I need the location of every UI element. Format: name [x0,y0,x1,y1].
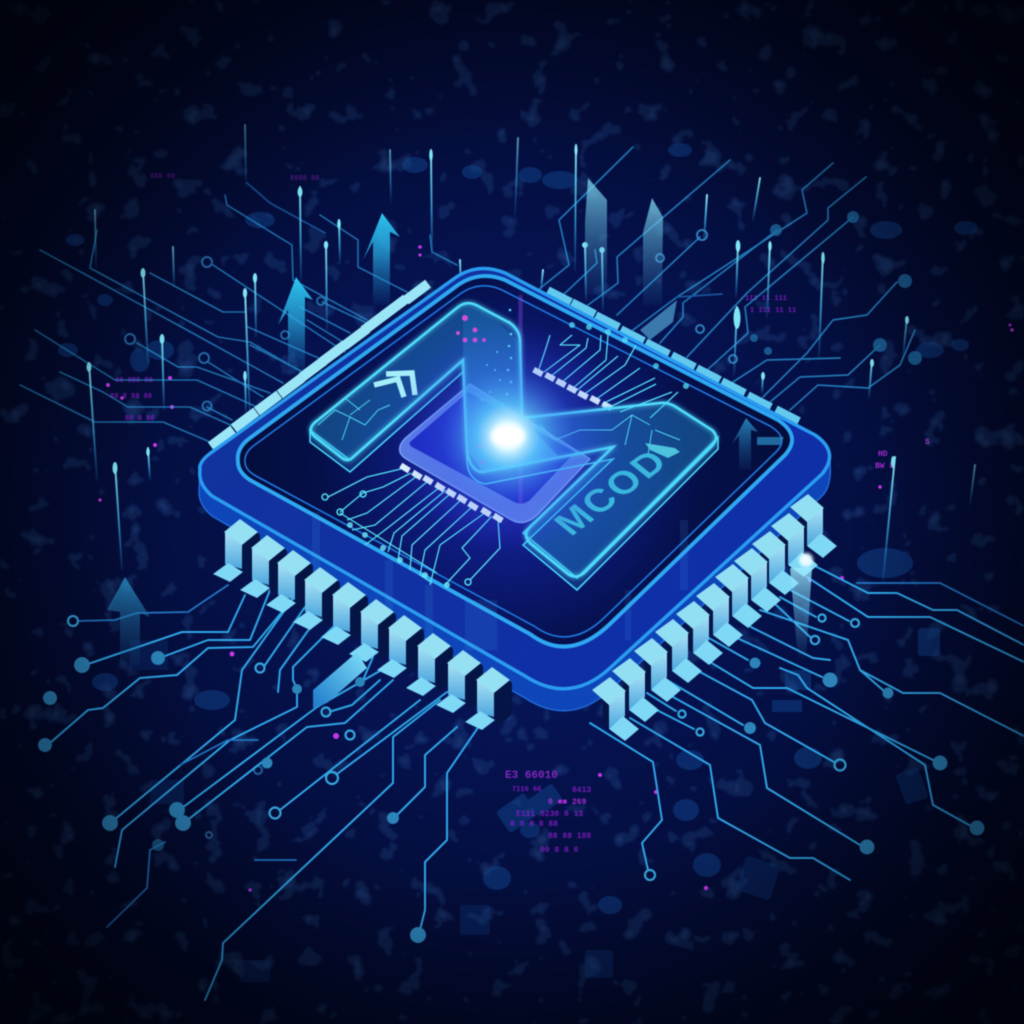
lower right pins [592,494,837,741]
signal line tips [86,144,909,474]
magenta micro text: 888 88 [150,173,175,181]
diagonal pale wedge [640,300,677,340]
magenta micro text: 88 8 88 88 [110,393,152,401]
trace terminals: lower right [744,658,984,854]
circuit cracks left bar [318,398,390,440]
arrow: left cyan up [278,277,313,375]
plate inner highlight [245,286,782,637]
arrow: large cyan up [363,213,400,305]
product label: MCOD [545,442,676,542]
board traces: lower left of inner chip [328,468,500,585]
circuit cracks right bar [540,415,680,455]
light beam right [790,568,812,660]
magenta dots [98,245,1014,892]
magenta micro text: 1 111 11 11 [750,307,796,315]
board nodes [322,491,471,585]
magenta micro text [110,173,930,855]
traces: upper left [20,183,457,442]
arrow: pale up 2 [643,198,663,305]
lower band reflections [312,512,688,650]
fish shaped mark [645,443,680,458]
traces: lower left [50,585,490,1000]
trace rings: upper right [656,230,737,363]
Z emblem depth [310,360,718,590]
upper right contact pads [545,287,801,426]
inner chip [399,367,613,523]
magenta micro text: 88 888 88 [115,377,153,385]
trace rings: upper left [125,257,325,410]
arrow: inside plate [732,418,758,470]
magenta micro text: BW 8 [875,462,894,471]
trace terminals: lower left [38,651,426,943]
Z emblem bright column [463,306,560,472]
glowing pad [313,652,367,708]
inner chip face [410,392,575,504]
magenta micro text: E3 66010 [505,770,558,782]
board nodes: upper right [569,322,689,389]
core hot spot [491,425,525,447]
trace rings: lower right [645,614,859,880]
magenta micro text: 7116 66 [512,786,541,794]
chip package [199,269,830,711]
Z emblem [310,303,718,590]
inner chip pins [399,367,613,523]
traces: upper right [538,147,915,410]
background components [58,143,978,982]
magenta micro text: E111 5230 0 13 [516,810,583,819]
magenta nodes on emblem [456,315,486,464]
traces: lower right [590,565,1024,880]
purple light beam [519,295,522,505]
magenta micro text: HD [878,450,888,459]
Z emblem face [311,303,716,577]
sparkle [799,553,813,567]
indicator bars inside plate [757,437,784,445]
trace rings: lower left [68,616,354,838]
dotted data column [481,309,512,405]
magenta micro text: 0 ■■ 269 [548,798,587,807]
magenta micro text: S [925,438,930,447]
magenta micro text: M 8 88 [690,505,715,513]
inner plate [238,276,792,646]
chip top surface [200,269,830,689]
magenta micro text: 8888 88 [290,175,319,183]
arrow: pale up 1 [585,178,607,295]
upper left contact pads [208,280,431,450]
lower left pins [213,519,512,730]
magenta micro text: 111 11 111 [745,295,787,303]
magenta micro text: 00 8 8 6 [540,846,579,855]
board traces: upper right of inner chip [538,335,678,418]
magenta micro text: 88 8 88 [125,415,154,423]
chevron icon [374,373,415,397]
board trace sparkles [347,522,450,588]
vertical signal lines [89,125,975,580]
core glow [393,321,623,551]
inner chip rim [400,384,590,523]
arrow: lower left dim [107,577,150,665]
magenta micro text: 88 88 188 [548,832,591,841]
trace terminals: upper right [750,211,922,365]
magenta micro text: 8413 [572,786,591,795]
magenta micro text: 8 0 8 8 88 [510,820,558,829]
chip base lip [199,462,830,711]
